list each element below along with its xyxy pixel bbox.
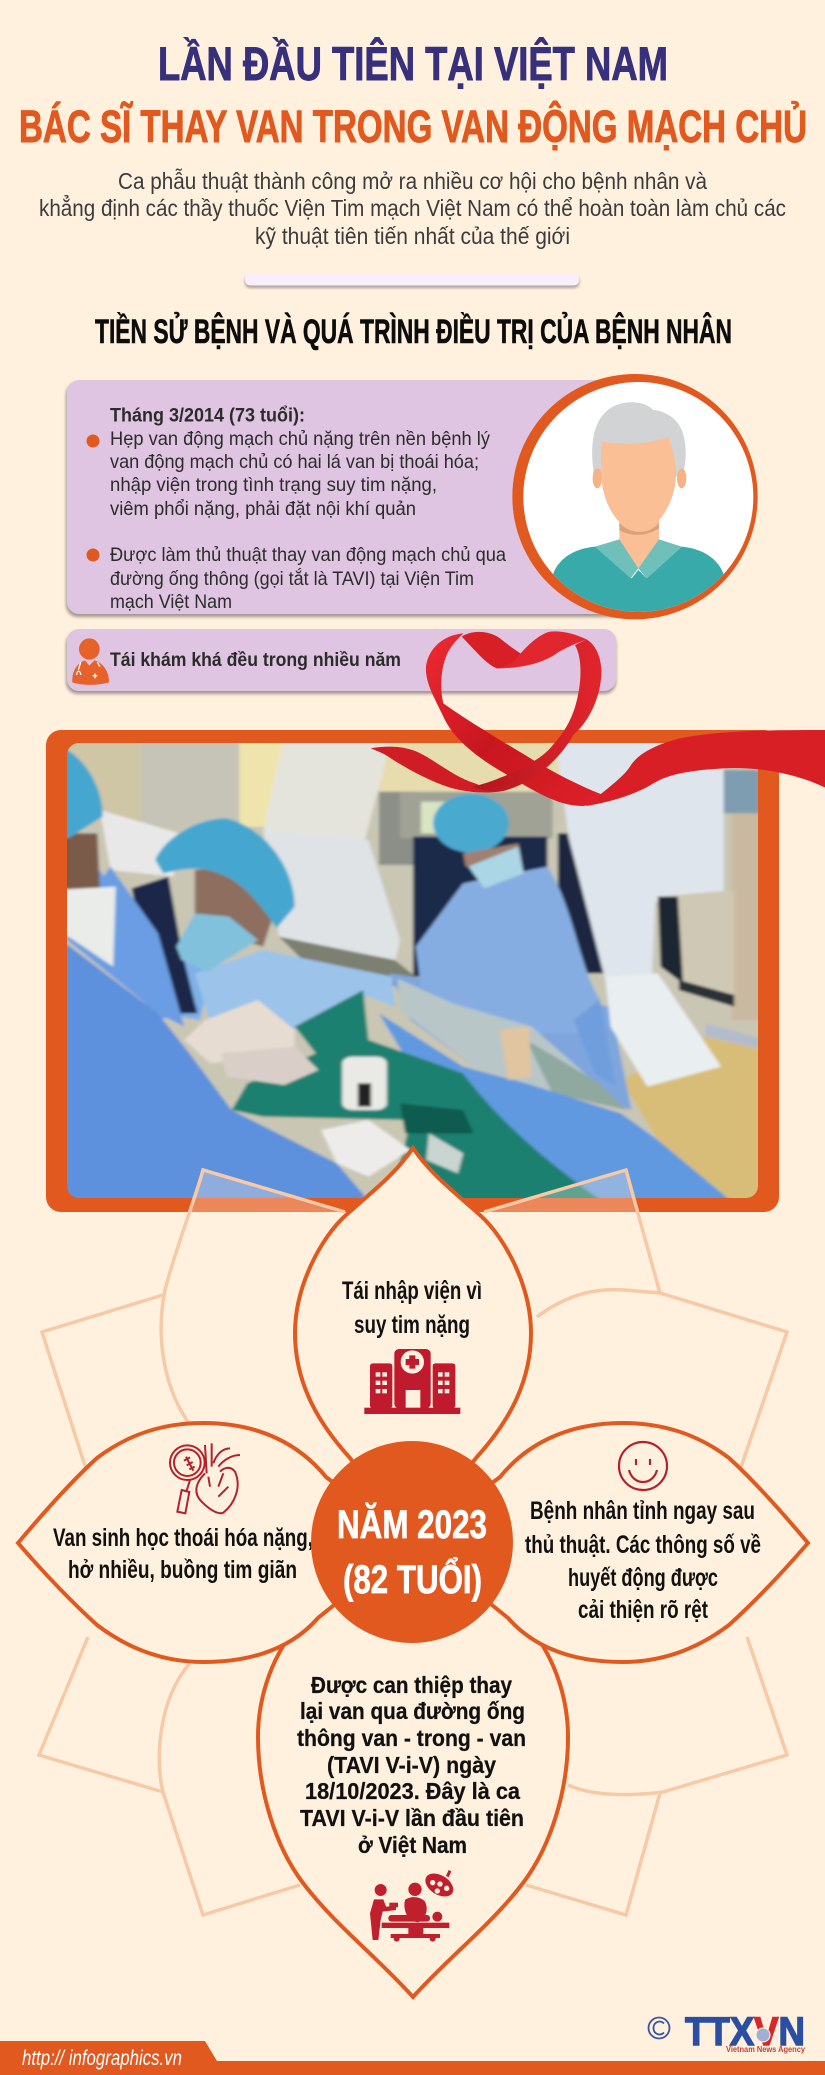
- procedure text: TAVI V-i-V lần đầu tiên: [300, 1805, 524, 1831]
- neck shadow: [619, 523, 659, 535]
- petal: readmission: [295, 1148, 531, 1542]
- valve text: [53, 1524, 313, 1584]
- procedure text: 18/10/2023. Đây là ca: [305, 1778, 520, 1804]
- follow-up text: Tái khám khá đều trong nhiều năm: [110, 649, 401, 671]
- petal outlines: [39, 1170, 787, 1915]
- readmission text: suy tim nặng: [354, 1311, 470, 1339]
- readmission text: Tái nhập viện vì: [342, 1277, 482, 1305]
- TTXVN logo: TTXVN: [685, 2010, 805, 2054]
- ears: [593, 468, 686, 488]
- petal: procedure: [258, 1542, 568, 1997]
- patient portrait: [512, 374, 758, 619]
- collar: [595, 539, 682, 578]
- background petals: [39, 1170, 787, 1915]
- intro text: kỹ thuật tiên tiến nhất của thế giới: [255, 223, 570, 249]
- bullet 2: [86, 548, 100, 562]
- neck: [619, 520, 659, 568]
- readmission text: [342, 1277, 482, 1339]
- procedure text: [297, 1672, 526, 1858]
- procedure text: (TAVI V-i-V) ngày: [327, 1752, 496, 1778]
- red ribbon heart: [371, 631, 825, 806]
- centre circle: year: NĂM 2023: [337, 1502, 487, 1547]
- logo globe: [756, 2028, 770, 2042]
- recovery text: Bệnh nhân tỉnh ngay sau: [530, 1497, 755, 1525]
- procedure text: ở Việt Nam: [358, 1832, 467, 1858]
- shirt: [553, 547, 723, 617]
- bullet 1 text: [110, 428, 490, 520]
- recovery text: huyết động được: [568, 1564, 718, 1592]
- title: [19, 37, 807, 152]
- copyright mark: [648, 2018, 670, 2038]
- procedure text: thông van - trong - van: [297, 1725, 526, 1751]
- icon: doctor: [72, 638, 109, 685]
- date label: Tháng 3/2014 (73 tuổi):: [110, 404, 305, 426]
- intro text: [39, 168, 786, 249]
- bullet 2 text: Được làm thủ thuật thay van động mạch chủ qua: [110, 544, 506, 566]
- hair: [592, 402, 686, 477]
- icon: hospital: [364, 1349, 460, 1414]
- petal: degenerated valve: [18, 1423, 412, 1662]
- valve text: Van sinh học thoái hóa nặng,: [53, 1524, 313, 1552]
- recovery text: cải thiện rõ rệt: [578, 1596, 709, 1624]
- petal: recovery: [414, 1423, 808, 1662]
- recovery text: [525, 1497, 761, 1624]
- panel: history 2014: [66, 380, 627, 617]
- bullet 2 text: đường ống thông (gọi tắt là TAVI) tại Viện Tim: [110, 567, 474, 590]
- bullet 1 text: viêm phổi nặng, phải đặt nội khí quản: [110, 498, 416, 520]
- face: [601, 437, 676, 532]
- bullet 2 text: mạch Việt Nam: [110, 591, 232, 613]
- bullet 1: [86, 434, 100, 448]
- procedure text: Được can thiệp thay: [311, 1672, 512, 1698]
- agency name: Vietnam News Agency: [726, 2045, 806, 2054]
- photo frame: [46, 730, 779, 1212]
- procedure text: lại van qua đường ống: [300, 1698, 525, 1724]
- divider bar: [245, 274, 579, 288]
- intro text: Ca phẫu thuật thành công mở ra nhiều cơ hội cho bệnh nhân và: [118, 168, 707, 194]
- bullet 1 text: van động mạch chủ có hai lá van bị thoái hóa;: [110, 451, 479, 473]
- translucent petal overlay on photo: [165, 1170, 660, 1293]
- icon: surgery team: [370, 1869, 457, 1942]
- footer url: http:// infographics.vn: [22, 2047, 182, 2070]
- bullet 1 text: Hẹp van động mạch chủ nặng trên nền bệnh lý: [110, 428, 490, 450]
- photo: doctors performing the procedure: [53, 737, 779, 1203]
- bullet 1 text: nhập viện trong tình trạng suy tim nặng,: [110, 474, 437, 496]
- icon: smiley: [619, 1442, 667, 1490]
- centre circle: year: (82 TUỔI): [343, 1555, 482, 1602]
- footer bar: [0, 2041, 825, 2075]
- valve text: hở nhiều, buồng tim giãn: [68, 1556, 297, 1584]
- centre circle: year: [311, 1441, 513, 1643]
- panel: follow-up: [66, 629, 616, 694]
- bullet 2 text: [110, 544, 506, 613]
- title line 1: LẦN ĐẦU TIÊN TẠI VIỆT NAM: [158, 37, 668, 90]
- icon: heart under magnifier: [170, 1443, 240, 1513]
